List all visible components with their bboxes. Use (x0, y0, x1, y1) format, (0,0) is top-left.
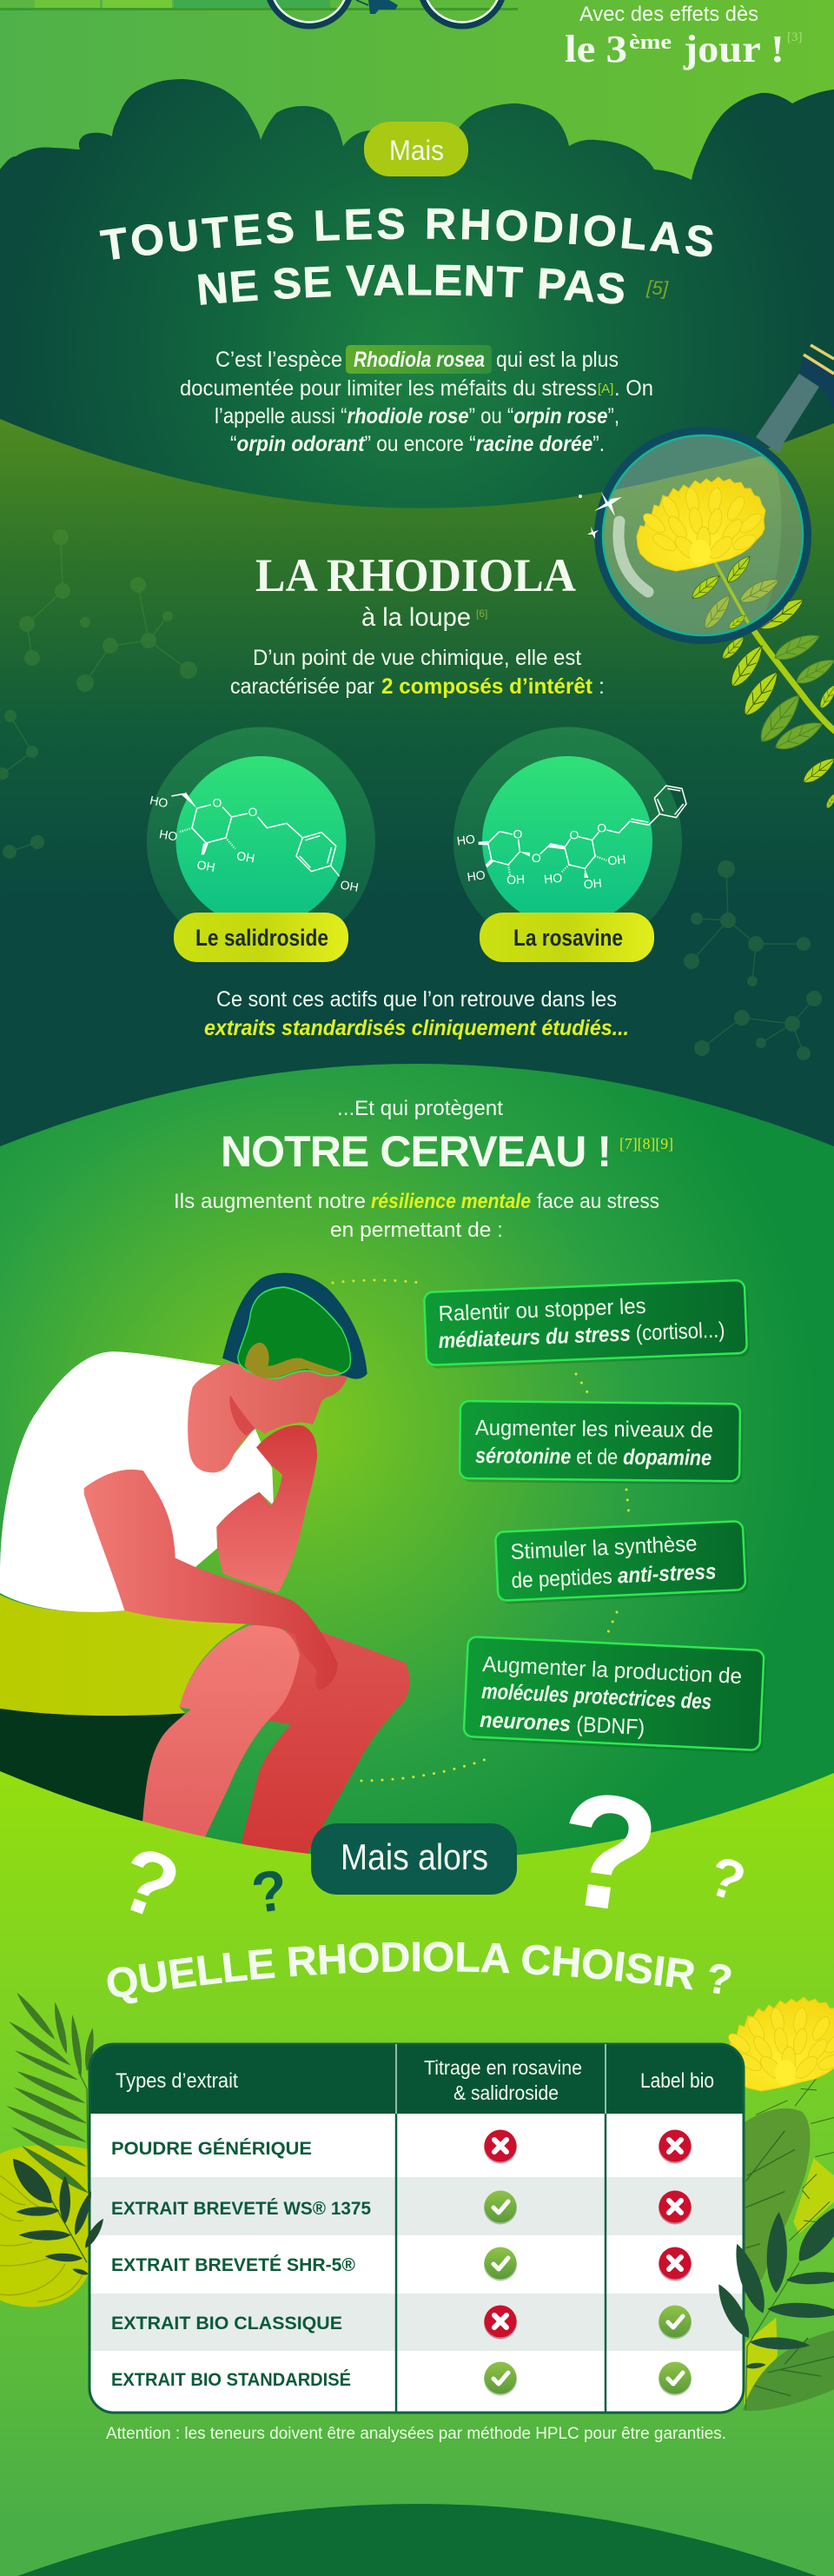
row: extrait breveté SHR-5 (111, 2247, 692, 2281)
illustration: seated thinking man (0, 1273, 409, 1880)
magnifying glass with rhodiola flower (579, 344, 834, 808)
brain stem (245, 1343, 341, 1378)
text: two compounds of interest: : (599, 674, 605, 699)
column dividers (396, 2044, 606, 2114)
header labels: Types d’extrait (116, 2069, 238, 2093)
text: standardised extracts (204, 987, 629, 1040)
row: extrait bio standardisé (111, 2362, 692, 2395)
molecule diagram: rosavine: HO (456, 832, 476, 848)
pill: Mais alors (311, 1823, 517, 1895)
row: poudre générique (111, 2129, 692, 2164)
top callout: effects from third day: jour ! (683, 28, 784, 70)
molecule diagram: rosavine: O (570, 827, 579, 841)
text: résilience mentale: Ils augmentent notre (174, 1190, 366, 1213)
shorts (0, 1709, 185, 1856)
intro paragraph: C’est l’espèce (215, 348, 342, 372)
title: toutes les rhodiolas ne se valent pas (99, 209, 712, 305)
molecule diagram: rosavine: O (597, 821, 606, 835)
row: poudre générique: POUDRE GÉNÉRIQUE (111, 2139, 312, 2159)
text: two compounds of interest (230, 646, 605, 699)
title: toutes les rhodiolas ne se valent pas: TOUTES LES RHODIOLAS (99, 209, 712, 260)
text: résilience mentale: en permettant de : (330, 1218, 503, 1242)
resting arm (84, 1470, 337, 1690)
heading: la rhodiola à la loupe: à la loupe (361, 603, 471, 632)
text: two compounds of interest: 2 composés d’intérêt (381, 674, 593, 699)
intro paragraph: l’appelle aussi “rhodiole rose” ou “orpin rose”, (215, 404, 619, 428)
footnote: HPLC warning: Attention : les teneurs doivent être analysées par méthode HPLC pour être garanties. (106, 2425, 726, 2443)
text: standardised extracts: Ce sont ces actifs que l’on retrouve dans les (216, 987, 617, 1012)
intro paragraph: “orpin odorant” ou encore “racine dorée”. (230, 432, 605, 456)
lower green leaf (743, 2329, 834, 2411)
text: standardised extracts: extraits standardisés cliniquement étudiés... (204, 1016, 629, 1040)
header labels: Label bio (640, 2069, 714, 2093)
thin twigs (756, 2075, 834, 2241)
right dark leaf sprig (712, 2195, 834, 2410)
compound: salidroside: Le salidroside (195, 925, 328, 951)
top callout: effects from third day: le 3 (565, 28, 627, 70)
title: toutes les rhodiolas ne se valent pas: NE SE VALENT PAS (198, 264, 624, 305)
top callout: effects from third day: ème (629, 31, 672, 54)
icons: question marks (105, 1757, 753, 1949)
row: extrait breveté WS 1375 (111, 2190, 692, 2225)
background molecules decoration (0, 529, 822, 1060)
heading: la rhodiola à la loupe (255, 549, 576, 632)
molecule diagram: rosavine: OH (607, 852, 626, 867)
halo circles (147, 727, 375, 956)
heading: et qui protègent notre cerveau (221, 1097, 673, 1176)
intro paragraph (180, 345, 653, 456)
icons: question marks: ? (701, 1843, 753, 1914)
right plants behind table (743, 2075, 834, 2411)
trousers (0, 1595, 246, 1716)
flower head, table backdrop (722, 1997, 834, 2091)
title: toutes les rhodiolas ne se valent pas: [5] (645, 276, 669, 299)
molecule diagram: salidroside: OH (195, 858, 216, 874)
molecule diagram: salidroside: O (248, 805, 258, 819)
palm frond (4, 1990, 96, 2197)
heading: quelle rhodiola choisir: QUELLE RHODIOLA CHOISIR ? (108, 1942, 731, 2004)
header labels (116, 2056, 714, 2104)
comparison table (89, 2044, 744, 2413)
sparkles (579, 492, 622, 539)
label pill (480, 913, 654, 962)
plant stem and leaves outside the lens (719, 592, 834, 810)
molecule diagram: rosavine: O (532, 851, 541, 865)
compound: rosavine: La rosavine (513, 925, 623, 951)
lens ring (594, 427, 811, 644)
header labels: & salidroside (453, 2081, 559, 2104)
molecule diagram: rosavine: OH (583, 876, 603, 892)
molecule diagram: salidroside: OH (235, 848, 256, 866)
far leg (232, 1620, 409, 1880)
text: résilience mentale (174, 1190, 659, 1242)
heading: et qui protègent notre cerveau: NOTRE CERVEAU ! (221, 1127, 612, 1176)
callout box: molécules protectrices des neurones: neurones (BDNF) (480, 1708, 645, 1740)
inner stem and leaves (692, 556, 779, 629)
large green leaf (743, 2108, 810, 2280)
intro paragraph: documentée pour limiter les méfaits du stress (180, 376, 597, 401)
header labels: Titrage en rosavine (424, 2056, 582, 2079)
molecule diagram: salidroside (149, 793, 360, 894)
text: résilience mentale: face au stress (537, 1190, 659, 1213)
top callout: effects from third day: [3] (787, 30, 803, 44)
intro paragraph: [A] (598, 382, 613, 396)
callout box: sérotonine et dopamine: sérotonine et de dopamine (475, 1444, 712, 1471)
heading: la rhodiola à la loupe: [6] (476, 607, 487, 620)
table rows and header fills (89, 2044, 744, 2413)
prop arm and hand (216, 1425, 317, 1593)
callout box: sérotonine et dopamine: Augmenter les niveaux de (475, 1416, 713, 1443)
near leg (139, 1624, 300, 1872)
intro paragraph: . On (614, 376, 653, 401)
text: two compounds of interest: D’un point de vue chimique, elle est (253, 646, 581, 670)
molecule diagram: rosavine (456, 786, 686, 892)
jaw shadow (229, 1395, 255, 1436)
lens rim (603, 435, 803, 635)
highlight: Rhodiola rosea (346, 345, 492, 374)
icons: question marks: ? (105, 1827, 192, 1941)
bottom dark green arc (17, 2504, 817, 2576)
row: extrait bio classique: EXTRAIT BIO CLASSIQUE (111, 2314, 342, 2334)
dotted connector trails (333, 1280, 629, 1781)
background: top green band (0, 0, 834, 278)
text: two compounds of interest: caractérisée par (230, 674, 374, 699)
halo circles (453, 727, 682, 956)
top callout: effects from third day: Avec des effets dès (579, 3, 758, 26)
top scene remnants: ground and bicycle wheels (0, 0, 518, 26)
heading: la rhodiola à la loupe: LA RHODIOLA (255, 549, 576, 601)
compound: rosavine (453, 727, 686, 962)
olive hill and dark green gradient background (0, 419, 834, 1217)
shirt (0, 1351, 274, 1612)
brain outline (238, 1287, 350, 1378)
hair (222, 1273, 367, 1379)
intro paragraph: Rhodiola rosea (354, 348, 485, 372)
yellow leaf (0, 2145, 89, 2307)
handle (756, 345, 834, 454)
heading: et qui protègent notre cerveau: [7][8][9] (619, 1135, 673, 1152)
lime green lower background (0, 1771, 834, 2576)
row: extrait breveté WS 1375: EXTRAIT BREVETÉ WS® 1375 (111, 2199, 371, 2219)
callout box: médiateurs du stress: médiateurs du stress (cortisol...) (438, 1318, 725, 1353)
callout box: molécules protectrices des neurones: molécules protectrices des (481, 1679, 712, 1714)
molecule diagram: salidroside: HO (149, 793, 169, 810)
callout box: médiateurs du stress: Ralentir ou stopper les (438, 1294, 646, 1326)
row: extrait bio standardisé: EXTRAIT BIO STANDARDISÉ (111, 2370, 351, 2390)
molecule diagram: salidroside: HO (158, 827, 179, 844)
row: extrait bio classique (111, 2305, 692, 2340)
top callout: effects from third day (565, 3, 803, 70)
icons: question marks: ? (248, 1857, 291, 1925)
head and neck (188, 1362, 348, 1472)
heading: et qui protègent notre cerveau: ...Et qui protègent (337, 1097, 503, 1120)
pill: Mais (364, 122, 468, 176)
lens highlight (619, 521, 648, 592)
molecule diagram: salidroside: O (213, 795, 222, 809)
left dark leaf sprig (5, 2153, 107, 2276)
callout box: peptides anti-stress (495, 1521, 748, 1604)
pill: Mais alors: Mais alors (341, 1836, 488, 1877)
flower head (637, 477, 765, 571)
molecule diagram: rosavine: HO (467, 867, 486, 884)
pill: Mais: Mais (389, 135, 444, 166)
green dome background (0, 1064, 834, 1912)
intro paragraph: qui est la plus (496, 348, 619, 372)
lens glass background (604, 436, 802, 634)
table outline (89, 2044, 744, 2413)
callout box: molécules protectrices des neurones: Augmenter la production de (482, 1652, 743, 1689)
callout box: médiateurs du stress (424, 1280, 750, 1369)
dark tree silhouette background (0, 79, 834, 608)
row: extrait breveté SHR-5: EXTRAIT BREVETÉ SHR-5® (111, 2255, 356, 2275)
molecule diagram: rosavine: HO (543, 871, 563, 886)
callout box: peptides anti-stress: Stimuler la synthèse (510, 1531, 698, 1564)
molecule diagram: rosavine: OH (506, 872, 525, 886)
left plant behind table (0, 1990, 96, 2307)
text: résilience mentale: résilience mentale (371, 1190, 531, 1213)
molecule diagram: salidroside: OH (339, 878, 360, 894)
molecule diagram: rosavine: O (513, 827, 523, 841)
compound: salidroside (147, 727, 375, 962)
callout box: sérotonine et dopamine (460, 1401, 743, 1484)
yellow leaf pieces (745, 2158, 834, 2407)
icons: question marks: ? (546, 1757, 669, 1949)
callout box: peptides anti-stress: de peptides anti-stress (511, 1559, 717, 1593)
callout box: molécules protectrices des neurones (464, 1637, 766, 1754)
label pill (174, 913, 348, 962)
